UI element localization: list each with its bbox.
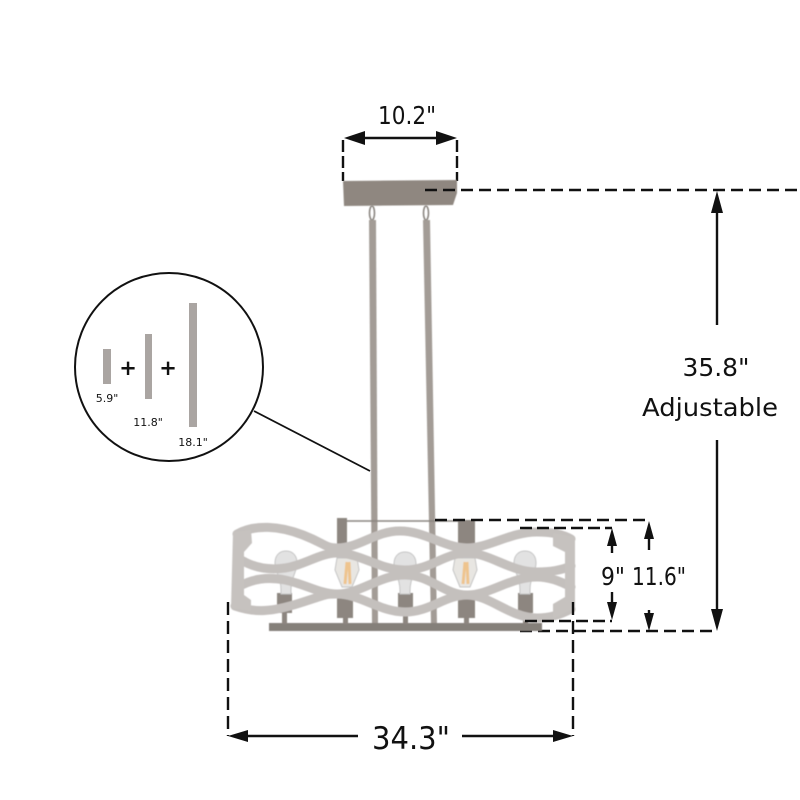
bottom bar — [269, 623, 542, 631]
chandelier fixture — [231, 518, 575, 631]
height dimension: 35.8 inches adjustable — [425, 190, 800, 631]
width dimension: 34.3 inches — [228, 602, 573, 757]
posts and sockets — [277, 518, 533, 624]
callout: extension rods — [75, 273, 370, 471]
height dimension: 11.6 inches — [435, 520, 686, 631]
bulbs — [275, 551, 536, 594]
width dimension: canopy 10.2 inches — [343, 101, 457, 181]
ceiling canopy — [343, 180, 457, 206]
wavy bands — [235, 527, 571, 618]
callout: extension rods: + — [159, 356, 177, 380]
height dimension: 9 inches — [520, 528, 625, 621]
height dimension: 11.6 inches: 11.6" — [632, 562, 686, 591]
height dimension: 35.8 inches adjustable: Adjustable — [642, 393, 778, 422]
height dimension: 9 inches: 9" — [601, 562, 625, 591]
callout: extension rods: 5.9" — [96, 392, 118, 405]
width dimension: 34.3 inches: 34.3" — [372, 721, 450, 757]
callout: extension rods: 11.8" — [133, 416, 163, 429]
width dimension: canopy 10.2 inches: 10.2" — [378, 101, 436, 130]
hanging chains and rods — [369, 206, 437, 625]
callout: extension rods: 18.1" — [178, 436, 208, 449]
callout: extension rods: + — [119, 356, 137, 380]
side frames — [231, 530, 252, 611]
height dimension: 35.8 inches adjustable: 35.8" — [682, 353, 750, 382]
